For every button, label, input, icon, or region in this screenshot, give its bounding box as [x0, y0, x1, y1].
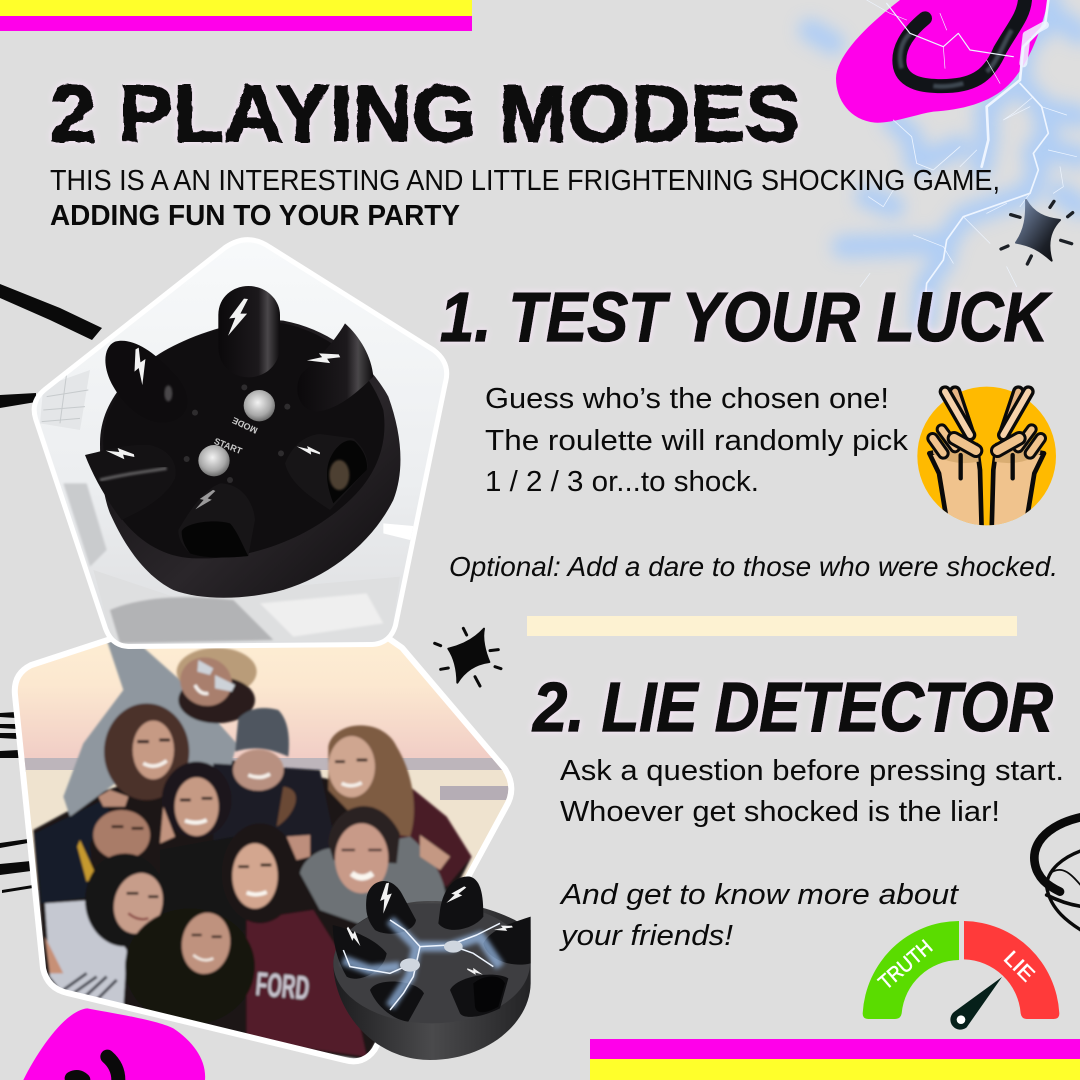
- text block: test your luck description: [485, 383, 909, 498]
- finger upper left: [105, 340, 156, 392]
- truth label: TRUTH: [874, 936, 937, 994]
- text block: test your luck description: Guess who’s the chosen one!: [485, 383, 889, 415]
- optional dare note: Optional: Add a dare to those who were shocked.: [449, 551, 1058, 582]
- center woman: [162, 762, 232, 838]
- grey hoodie arm: [63, 638, 237, 817]
- room background: [40, 370, 90, 430]
- hat woman: [176, 648, 258, 688]
- finger left: [85, 451, 122, 520]
- icon: crossed fingers: [917, 387, 1056, 530]
- dark jacket: [212, 762, 332, 853]
- text block: italic friends note: [559, 879, 960, 952]
- middle woman: [231, 824, 292, 924]
- small dots: [184, 384, 290, 483]
- blob: [836, 0, 1048, 123]
- text block: lie detector description: Whoever get shocked is the liar!: [560, 796, 1000, 828]
- title: 2 PLAYING MODES: [50, 69, 800, 158]
- fingers: [333, 877, 531, 1022]
- text block: lie detector description: [560, 755, 1064, 828]
- text block: italic friends note: And get to know more about: [559, 879, 960, 911]
- swoosh: [899, 0, 1025, 86]
- finger upper right: [332, 324, 374, 406]
- text block: test your luck description: The roulette will randomly pick: [485, 425, 909, 457]
- left woman: [45, 900, 127, 1007]
- photo panel: roulette shock machine: [32, 237, 450, 649]
- right woman: [328, 725, 414, 837]
- subtitle line 2: ADDING FUN TO YOUR PARTY: [50, 200, 460, 232]
- brush scribbles: left side: [0, 284, 102, 893]
- text block: test your luck description: 1 / 2 / 3 or...to shock.: [485, 466, 759, 498]
- subtitle line 1: THIS IS A AN INTERESTING AND LITTLE FRIGHTENING SHOCKING GAME,: [50, 165, 1000, 197]
- grinning woman: [300, 837, 447, 927]
- top colour bars: [0, 0, 472, 31]
- forehead-hand woman: [35, 800, 110, 903]
- maroon sweatshirt: [247, 910, 367, 1057]
- lightning bolts: [860, 0, 1077, 320]
- black sparkle star: [435, 628, 501, 686]
- bottom woman: [125, 908, 255, 1025]
- button labels: START: [213, 436, 244, 456]
- photo panel: friends group: [12, 637, 514, 1064]
- scribble coil: right: [1034, 817, 1080, 932]
- cream divider: [527, 616, 1017, 636]
- needle: [950, 977, 1002, 1030]
- cap woman: [233, 749, 284, 791]
- text block: italic friends note: your friends!: [559, 920, 733, 952]
- magenta blob with black swoosh and lightning: top right: [810, 0, 1080, 320]
- buttons: [244, 390, 275, 421]
- photo panel: friends group: FORD: [254, 966, 311, 1008]
- electric arcs: [343, 920, 500, 1007]
- lightning glow: [810, 0, 1080, 320]
- body: [333, 901, 531, 1060]
- puck top face: [103, 322, 384, 558]
- lie label: LIE: [999, 947, 1039, 986]
- puck body: [100, 320, 400, 598]
- top face: [333, 903, 530, 1023]
- lie arc: [964, 921, 1059, 1019]
- sparkle star: [1001, 200, 1073, 264]
- truth arc: [863, 921, 959, 1019]
- long-hair woman: [104, 703, 189, 800]
- roulette with lightning: [333, 877, 531, 1060]
- finger bottom: [247, 554, 248, 556]
- magenta blob: bottom left: [23, 1008, 205, 1080]
- finger top: [218, 286, 280, 377]
- maroon jacket: [393, 787, 472, 887]
- dark crowd base: [33, 757, 472, 1060]
- photo panel: roulette shock machine: MODE: [231, 415, 259, 436]
- truth / lie gauge: [863, 921, 1059, 1030]
- text block: lie detector description: Ask a question before pressing start.: [560, 755, 1064, 787]
- finger right lower: [285, 434, 368, 510]
- bottom colour bars: [590, 1039, 1080, 1080]
